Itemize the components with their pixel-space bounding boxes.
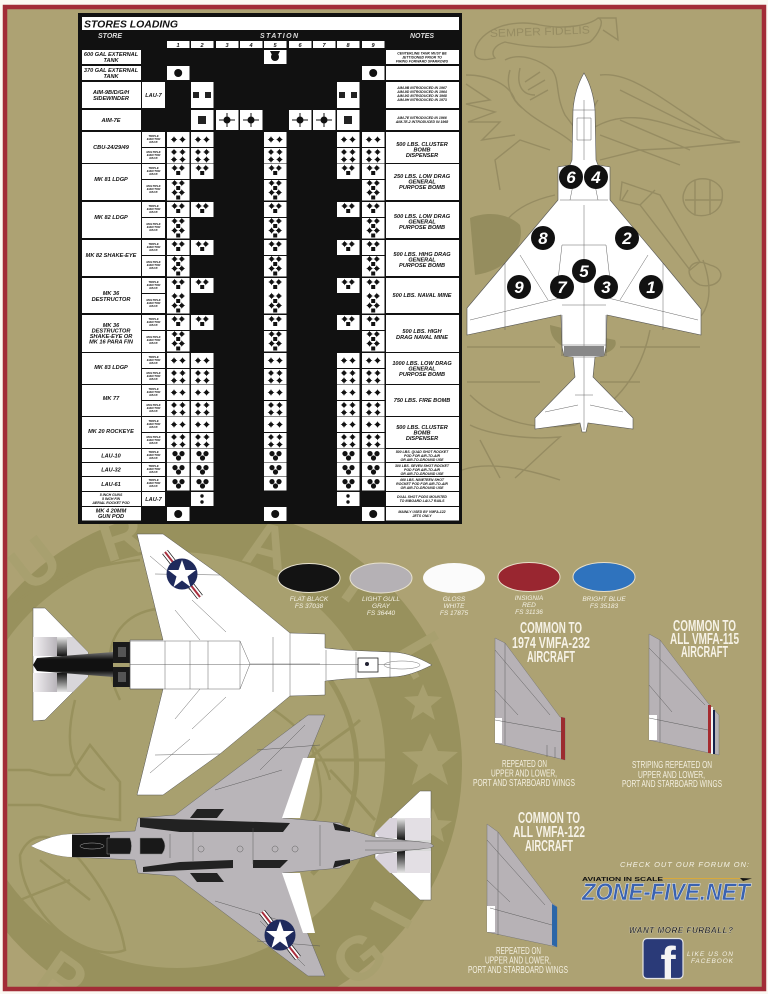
like caption: LIKE US ON (687, 951, 733, 958)
caption (622, 760, 722, 790)
nose camera window (358, 658, 378, 672)
table row: MK 82: MK 82 LDGP (94, 215, 128, 221)
gray fuselage and wings (31, 715, 434, 976)
emblem inner field (0, 552, 385, 968)
table row: LAU-32 (82, 463, 459, 476)
underside silhouette (467, 73, 701, 432)
table row: MK 20 Rockeye: EJECTOR (147, 422, 161, 426)
table row: MK 36 Destructor: MULTIPLE (146, 298, 161, 302)
table row: MK 20 Rockeye: MK 20 ROCKEYE (88, 429, 134, 435)
table row: AIM-7 (82, 110, 459, 130)
table title: STORES LOADING (84, 20, 178, 30)
table row: MK 20 Rockeye: MULTIPLE (146, 435, 161, 439)
panel: stores loading table (78, 13, 462, 524)
station number badges: 4 (590, 168, 601, 187)
anti-glare and canopy (72, 835, 110, 857)
Zone-Five logo: ZONE-FIVE.NET (581, 879, 752, 906)
swatch: light gull gray (350, 563, 412, 617)
station number badges: 7 (557, 278, 568, 297)
table row: MK 77: RACK (149, 393, 159, 397)
table row: CBU-24/29/49: BOMB (413, 148, 431, 154)
station numbers: 1 (176, 43, 180, 49)
table row: CBU-24/29/49 (82, 132, 459, 164)
wing chip: VMFA-122 (468, 810, 585, 976)
table row: MK 82 (82, 202, 459, 238)
forum promo (581, 860, 752, 906)
table row: 5 inch rocket pod: TO INBOARD LAU-7 RAILS (400, 499, 445, 503)
eagle body and wings (505, 57, 580, 135)
table row: MK 36 Destructor Shake-Eye: RACK (149, 341, 159, 345)
table row: MK 36 Destructor Shake-Eye: 500 LBS. HIGH (402, 329, 443, 335)
table row: MK 36 Destructor Shake-Eye: MULTIPLE (146, 335, 161, 339)
swatch: insignia red: INSIGNIA (515, 595, 543, 602)
caption (468, 946, 568, 976)
table row: LAU-10: POD FOR AIR-TO-AIR (404, 454, 440, 458)
table row: CBU-24/29/49: CBU-24/29/49 (93, 145, 130, 151)
heading: ALL VMFA-122 (513, 824, 585, 841)
table row: MK 81: PURPOSE BOMB (399, 185, 445, 191)
swatch: light gull gray: GRAY (372, 603, 391, 610)
table row: MK 82 Shake-Eye: MULTIPLE (146, 260, 161, 264)
heading (513, 810, 585, 855)
white wing stripes (282, 758, 315, 933)
table row: LAU-61: TRIPLE (148, 478, 159, 482)
table row: MK 36 Destructor Shake-Eye (82, 315, 459, 352)
lower scroll (462, 425, 560, 480)
station number badges: 9 (514, 278, 524, 297)
table row: AIM-9: AIM-9H INTRODUCED IN 1973 (396, 98, 447, 102)
table row: MK 83: MK 83 LDGP (94, 365, 128, 371)
station numbers: 5 (273, 43, 277, 49)
caption: REPEATED ON (496, 946, 541, 957)
swatch: gloss white (423, 563, 485, 617)
station number badges: 5 (579, 262, 589, 281)
emblem ring letters (0, 497, 462, 994)
heading: AIRCRAFT (525, 838, 573, 855)
swatch: bright blue: BRIGHT BLUE (582, 596, 626, 603)
table row: MK 20 Rockeye: EJECTOR (147, 438, 161, 442)
table row: MK 82 Shake-Eye: RACK (149, 248, 159, 252)
table row: CBU-24/29/49: EJECTOR (147, 137, 161, 141)
station numbers: 9 (371, 43, 375, 49)
table row: LAU-61: ROCKET POD FOR AIR-TO-AIR (396, 482, 448, 486)
table row: MK 82: 500 LBS. LOW DRAG (394, 214, 451, 220)
rope flowers (683, 179, 722, 286)
caption: PORT AND STARBOARD WINGS (468, 965, 568, 976)
swatch: insignia red: RED (522, 602, 536, 609)
panel lines (170, 725, 430, 966)
table row: MK 4 gun pod (82, 507, 459, 521)
table row: LAU-10: EJECTOR (147, 453, 161, 457)
table row: LAU-61: 460 LBS. NINETEEN SHOT (399, 478, 445, 482)
table row: CBU-24/29/49: RACK (149, 140, 159, 144)
black walkway stripes (140, 809, 350, 882)
nose panel outline (384, 661, 420, 669)
motto text: SEMPER FIDELIS (490, 25, 590, 40)
aircraft: underside view with station numbers (467, 73, 701, 432)
table row: 5 inch rocket pod: 5 INCH FIN (102, 497, 121, 501)
swatch: gloss white: FS 17875 (440, 610, 468, 617)
table row: CBU-24/29/49: DISPENSER (406, 153, 438, 159)
table row: MK 4 gun pod: MK 4 20MM (96, 508, 127, 514)
table row: AIM-7: AIM-7E-2 INTRODUCED IN 1968 (395, 120, 448, 124)
table row: MK 83 (82, 353, 459, 384)
table row: 370 gal tank (82, 66, 459, 80)
table row: LAU-61: RACK (149, 484, 159, 488)
table row: MK 81: TRIPLE (148, 166, 159, 170)
emblem ring letters: A (237, 507, 298, 585)
swatch: gloss white: GLOSS (443, 596, 466, 603)
white nose (31, 834, 72, 857)
table row: MK 4 gun pod: MAINLY USED BY VMFA-122 (398, 510, 446, 514)
wing (649, 634, 719, 755)
Facebook promo (629, 926, 734, 989)
table row: MK 83: EJECTOR (147, 358, 161, 362)
table row: LAU-10: 500 LBS. QUAD SHOT ROCKET (396, 450, 449, 454)
swatch: flat black (278, 564, 340, 610)
station numbers: 4 (248, 43, 253, 49)
table row: MK 36 Destructor (82, 278, 459, 314)
table row: CBU-24/29/49: MULTIPLE (146, 150, 161, 154)
table row: MK 81: RACK (149, 190, 159, 194)
panel lines (130, 556, 390, 773)
stabilizers (375, 791, 431, 900)
table row: AIM-9: AIM-9B/D/G/H (92, 90, 130, 96)
heading: COMMON TO (520, 620, 582, 637)
emblem stars (402, 684, 458, 842)
scroll with motto (475, 18, 601, 60)
table row: MK 82: RACK (149, 228, 159, 232)
caption: UPPER AND LOWER, (491, 768, 557, 780)
table row: MK 77: 750 LBS. FIRE BOMB (394, 398, 450, 404)
table row: MK 36 Destructor: RACK (149, 304, 159, 308)
swatch: insignia red (498, 562, 560, 616)
station numbers: 3 (225, 43, 229, 49)
table row: MK 81: 250 LBS. LOW DRAG (393, 174, 451, 180)
table row: MK 4 gun pod: GUN POD (98, 514, 124, 520)
table row: MK 20 Rockeye: DISPENSER (406, 436, 438, 442)
engine nozzles (113, 642, 130, 687)
heading: COMMON TO (518, 810, 580, 827)
emblem ring letters: L (383, 621, 462, 688)
table row: MK 82 Shake-Eye: MK 82 SHAKE-EYE (86, 253, 137, 259)
wing chip: VMFA-232 (473, 620, 590, 789)
table row: MK 20 Rockeye: 500 LBS. CLUSTER (396, 425, 448, 431)
table row: AIM-9: AIM-9G INTRODUCED IN 1968 (396, 94, 447, 98)
table row: MK 82 Shake-Eye (82, 240, 459, 276)
like caption: FACEBOOK (691, 958, 734, 965)
table row: AIM-9: SIDEWINDER (93, 96, 129, 102)
table row: MK 82: EJECTOR (147, 225, 161, 229)
table row: 600 gal tank (82, 50, 459, 64)
table row: LAU-32: 300 LBS. SEVEN SHOT ROCKET (395, 464, 450, 468)
table row: AIM-7: AIM-7E INTRODUCED IN 1966 (396, 116, 447, 120)
station number badges: 2 (621, 229, 632, 248)
table row: LAU-32: LAU-32 (101, 468, 122, 474)
table row: MK 36 Destructor Shake-Eye: EJECTOR (147, 320, 161, 324)
emblem ring (0, 508, 462, 994)
station numbers: 2 (199, 43, 204, 49)
emblem ring letters: I (357, 892, 426, 939)
forum heading: CHECK OUT OUR FORUM ON: (620, 860, 749, 869)
station number badges (507, 165, 663, 299)
underside panel lines (470, 100, 698, 430)
tail cone (33, 652, 113, 677)
table row: MK 36 Destructor: DESTRUCTOR (92, 297, 130, 303)
table row: 5 inch rocket pod: 5 INCH GUNS (100, 493, 123, 497)
emblem ring letters: R (90, 497, 154, 576)
column headings: NOTES (410, 33, 434, 40)
table row: MK 81: EJECTOR (147, 169, 161, 173)
swatch: bright blue (573, 562, 635, 610)
station numbers: 7 (322, 43, 326, 49)
table row: 600 gal tank: FIRING FORWARD SPARROWS (396, 60, 449, 64)
table row: MK 36 Destructor Shake-Eye: DRAG NAVAL MINE (396, 335, 448, 341)
icon: facebook: f (660, 937, 676, 989)
station numbers (167, 41, 384, 49)
table row: 600 gal tank: JETTISONED PRIOR TO (402, 56, 442, 60)
table row: MK 82: GENERAL (408, 220, 436, 226)
table row: MK 83: RACK (149, 361, 159, 365)
table row: LAU-32: TRIPLE (148, 464, 159, 468)
table row: LAU-10: OR AIR-TO-GROUND USE (401, 458, 444, 462)
swatch: light gull gray: FS 36440 (367, 610, 395, 617)
caption: UPPER AND LOWER, (485, 956, 551, 966)
wing (487, 824, 557, 947)
table row: LAU-10 (82, 449, 459, 462)
table row: MK 83: RACK (149, 377, 159, 381)
table row: LAU-10: RACK (149, 456, 159, 460)
table row: MK 82 Shake-Eye: PURPOSE BOMB (399, 263, 445, 269)
table row: MK 82: TRIPLE (148, 204, 159, 208)
table row: MK 82: MULTIPLE (146, 222, 161, 226)
table row: LAU-10: TRIPLE (148, 450, 159, 454)
heading: 1974 VMFA-232 (512, 635, 590, 652)
national insignia on wing (262, 912, 298, 958)
paint swatches legend (278, 562, 635, 617)
station number badges: 8 (538, 229, 548, 248)
table row: LAU-61 (82, 477, 459, 491)
white fuselage and wings (130, 534, 432, 795)
aircraft: white underside profile (33, 534, 432, 795)
table row: MK 77 (82, 385, 459, 416)
table row: 600 gal tank: 600 GAL EXTERNAL (84, 52, 139, 58)
table row: MK 77: MK 77 (103, 396, 120, 402)
table row: CBU-24/29/49: EJECTOR (147, 153, 161, 157)
stabilizer shading (375, 818, 397, 873)
table row: LAU-61: OR AIR-TO-GROUND USE (401, 486, 444, 490)
table row: MK 77: EJECTOR (147, 406, 161, 410)
table row: LAU-32: RACK (149, 470, 159, 474)
promo heading: WANT MORE FURBALL? (629, 926, 733, 935)
table row: MK 82 Shake-Eye: GENERAL (408, 258, 436, 264)
caption (473, 759, 575, 789)
heading: AIRCRAFT (527, 649, 575, 666)
table row: MK 20 Rockeye: BOMB (413, 430, 431, 436)
table row: MK 36 Destructor Shake-Eye: EJECTOR (147, 338, 161, 342)
aircraft: gull gray top view (31, 715, 434, 976)
table row: LAU-32: POD FOR AIR-TO-AIR (404, 468, 440, 472)
table row: MK 77: MULTIPLE (146, 403, 161, 407)
table row: MK 77: EJECTOR (147, 390, 161, 394)
table row: MK 82 Shake-Eye: 500 LBS. HIHG DRAG (393, 252, 451, 258)
caption: STRIPING REPEATED ON (632, 760, 712, 771)
table row: MK 82: PURPOSE BOMB (399, 225, 445, 231)
table row: MK 36 Destructor Shake-Eye: TRIPLE (148, 317, 159, 321)
table row: MK 36 Destructor Shake-Eye: RACK (149, 323, 159, 327)
table row: LAU-10: LAU-10 (101, 454, 122, 460)
table row: CBU-24/29/49: TRIPLE (148, 134, 159, 138)
caption: UPPER AND LOWER, (638, 770, 705, 781)
table row: AIM-7: AIM-7E (101, 118, 121, 124)
table row: LAU-61: EJECTOR (147, 481, 161, 485)
table row: 370 gal tank: 370 GAL EXTERNAL (84, 68, 139, 74)
table row: AIM-9: AIM-9B INTRODUCED IN 1967 (396, 86, 448, 90)
swatch: bright blue: FS 35183 (590, 603, 618, 610)
table row: MK 82 Shake-Eye: EJECTOR (147, 245, 161, 249)
table row: MK 20 Rockeye: TRIPLE (148, 419, 159, 423)
column headings (98, 33, 434, 40)
table row: MK 82: EJECTOR (147, 207, 161, 211)
table row: MK 36 Destructor: MK 36 (103, 291, 120, 297)
lower emblem watermark (0, 497, 462, 994)
table row: MK 81: EJECTOR (147, 187, 161, 191)
table row: 5 inch rocket pod: LAU-7 (145, 497, 163, 503)
table row: MK 81: GENERAL (408, 180, 436, 186)
column headings: STATION (260, 33, 299, 40)
table row: MK 83: TRIPLE (148, 355, 159, 359)
station number badges: 3 (601, 278, 611, 297)
emblem ring letters: I (330, 550, 384, 616)
table row: MK 83: MULTIPLE (146, 371, 161, 375)
station number badges: 1 (646, 278, 656, 297)
table row: MK 36 Destructor: TRIPLE (148, 280, 159, 284)
table row: MK 20 Rockeye: RACK (149, 425, 159, 429)
table row: MK 20 Rockeye: RACK (149, 441, 159, 445)
table row: LAU-32: OR AIR-TO-GROUND USE (401, 472, 444, 476)
Zone-Five logo: AVIATION IN SCALE (582, 877, 663, 883)
swatch: light gull gray: LIGHT GULL (362, 596, 400, 603)
table row: MK 36 Destructor: 500 LBS. NAVAL MINE (392, 293, 452, 299)
heading (512, 620, 590, 666)
swatch: flat black: FS 37038 (295, 603, 323, 610)
table row: MK 82 Shake-Eye: EJECTOR (147, 263, 161, 267)
caption: REPEATED ON (502, 759, 547, 770)
like caption (687, 951, 734, 965)
table row: MK 36 Destructor: RACK (149, 286, 159, 290)
table row: MK 82 Shake-Eye: TRIPLE (148, 242, 159, 246)
table row: CBU-24/29/49: 500 LBS. CLUSTER (396, 142, 448, 148)
table row: MK 81: RACK (149, 172, 159, 176)
globe landmasses (470, 214, 521, 275)
table row: 5 inch rocket pod: DUAL SHOT PODS MOUNTED (397, 495, 447, 499)
emblem inner arc (302, 649, 357, 874)
station numbers: 6 (298, 43, 302, 49)
table row: MK 20 Rockeye (82, 417, 459, 448)
table row: MK 82: RACK (149, 210, 159, 214)
table row: MK 82 Shake-Eye: RACK (149, 266, 159, 270)
table row: MK 36 Destructor Shake-Eye: MK 16 PARA FIN (89, 340, 134, 346)
globe (470, 195, 650, 427)
station number badges: 6 (566, 168, 576, 187)
table row: 370 gal tank: TANK (103, 74, 120, 80)
swatch: flat black: FLAT BLACK (290, 596, 329, 603)
caption: PORT AND STARBOARD WINGS (473, 778, 575, 789)
table row: MK 36 Destructor Shake-Eye: DESTRUCTOR (92, 328, 130, 334)
table title (82, 17, 459, 30)
table row: MK 81 (82, 164, 459, 200)
table row: MK 83: 1000 LBS. LOW DRAG (392, 361, 452, 367)
station numbers: 8 (346, 43, 350, 49)
table background (78, 13, 462, 524)
stabilizers (33, 608, 88, 721)
swatch: insignia red: FS 31136 (515, 609, 543, 616)
table row: 600 gal tank: CENTERLINE TANK MUST BE (397, 52, 447, 56)
table row: CBU-24/29/49: RACK (149, 156, 159, 160)
table row: MK 36 Destructor Shake-Eye: SHAKE-EYE OR (90, 334, 132, 340)
national insignia on wing (165, 552, 200, 597)
table row: MK 4 gun pod: JETS ONLY (412, 514, 432, 518)
heading (670, 618, 739, 661)
table row: MK 83: EJECTOR (147, 374, 161, 378)
column headings: STORE (98, 33, 122, 40)
table row: AIM-9: AIM-9D INTRODUCED IN 1964 (396, 90, 447, 94)
swatch: gloss white: WHITE (444, 603, 465, 610)
emblem bulldog outlines (8, 560, 390, 953)
table row: 5 inch rocket pod: AERIAL ROCKET POD (91, 501, 130, 505)
table row: MK 81: MK 81 LDGP (94, 177, 128, 183)
upper Eagle Globe and Anchor watermark (462, 18, 740, 480)
table row: MK 36 Destructor Shake-Eye: MK 36 (103, 323, 120, 329)
table row: LAU-32: EJECTOR (147, 467, 161, 471)
table row: 5 inch rocket pod (82, 492, 459, 506)
stabilizer shading (33, 637, 57, 692)
table row: MK 77: TRIPLE (148, 387, 159, 391)
table row: MK 77: RACK (149, 409, 159, 413)
table row: 600 gal tank: TANK (103, 58, 120, 64)
wing chip: VMFA-115 (622, 618, 739, 790)
table row: MK 83: GENERAL (408, 366, 436, 372)
table row: MK 36 Destructor: EJECTOR (147, 283, 161, 287)
wing (495, 638, 565, 760)
anchor (620, 182, 700, 270)
table row: MK 83: PURPOSE BOMB (399, 372, 445, 378)
table row: LAU-61: LAU-61 (101, 482, 121, 488)
heading: AIRCRAFT (681, 644, 728, 661)
table row: AIM-9: LAU-7 (145, 93, 163, 99)
table row: MK 81: MULTIPLE (146, 184, 161, 188)
table row: AIM-9 (82, 82, 459, 108)
table row: MK 36 Destructor: EJECTOR (147, 301, 161, 305)
